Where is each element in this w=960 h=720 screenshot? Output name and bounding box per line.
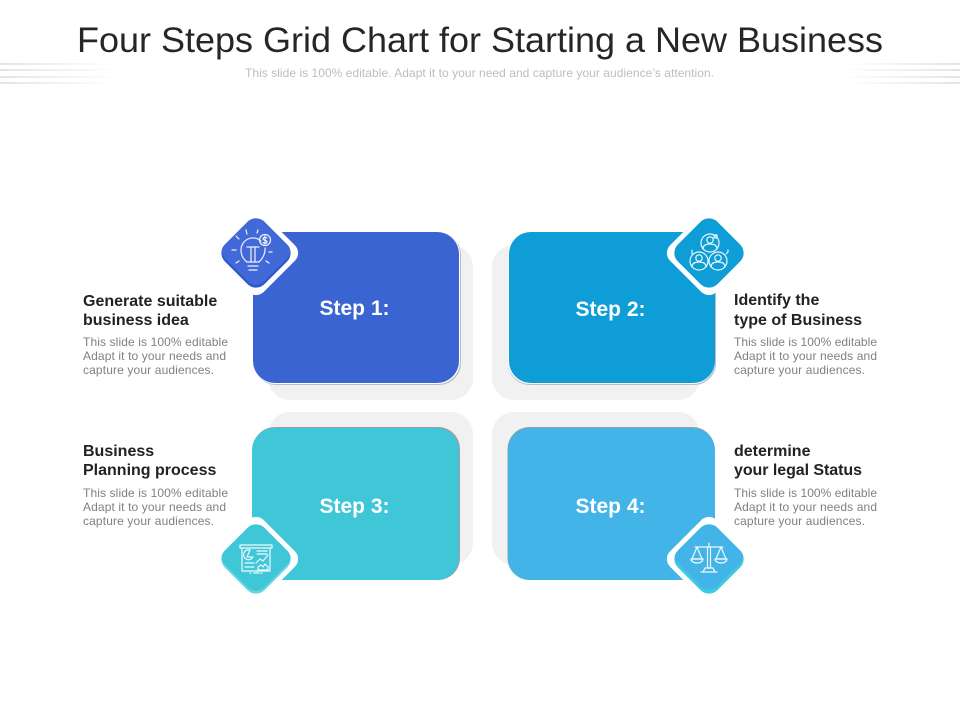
text block: step 2: type of Business bbox=[734, 312, 862, 329]
text block: step 2: Adapt it to your needs and bbox=[734, 349, 877, 363]
text block: step 4: determine bbox=[734, 443, 811, 460]
icon: light bulb with dollar bbox=[221, 218, 298, 296]
text block: step 2: This slide is 100% editable bbox=[734, 335, 877, 349]
step 3 label: Step 3: bbox=[319, 495, 390, 518]
panel: step 1 bbox=[253, 232, 473, 400]
text block: step 1: capture your audiences. bbox=[83, 363, 214, 377]
text block: step 2: Identify the bbox=[734, 292, 819, 309]
panel: step 2 bbox=[492, 232, 716, 400]
icon: presentation board bbox=[221, 516, 298, 594]
text block: step 4: your legal Status bbox=[734, 462, 862, 479]
text block: step 3: Planning process bbox=[83, 462, 216, 479]
step 2 label: Step 2: bbox=[575, 298, 646, 321]
text block: step 1: business idea bbox=[83, 312, 189, 329]
text block: step 3: Business bbox=[83, 443, 154, 460]
text block: step 1: This slide is 100% editable bbox=[83, 335, 228, 349]
text block: step 3: This slide is 100% editable bbox=[83, 486, 228, 500]
text block: step 1 bbox=[83, 293, 228, 377]
text block: step 2: capture your audiences. bbox=[734, 363, 865, 377]
step 4 label: Step 4: bbox=[575, 495, 646, 518]
text block: step 3: Adapt it to your needs and bbox=[83, 500, 226, 514]
icon: three people bbox=[662, 206, 756, 300]
text block: step 4 bbox=[734, 443, 877, 528]
subtitle: This slide is 100% editable. Adapt it to your need and capture your audience’s attention. bbox=[245, 66, 714, 80]
icon: balance scales bbox=[666, 516, 744, 594]
text block: step 1: Generate suitable bbox=[83, 293, 217, 310]
text block: step 2 bbox=[734, 292, 877, 377]
text block: step 4: Adapt it to your needs and bbox=[734, 500, 877, 514]
text block: step 4: capture your audiences. bbox=[734, 514, 865, 528]
text block: step 3 bbox=[83, 443, 228, 528]
title: Four Steps Grid Chart for Starting a New Business bbox=[77, 21, 883, 60]
text block: step 1: Adapt it to your needs and bbox=[83, 349, 226, 363]
text block: step 3: capture your audiences. bbox=[83, 514, 214, 528]
step 1 label: Step 1: bbox=[319, 297, 390, 320]
panel: step 4 bbox=[492, 412, 715, 580]
text block: step 4: This slide is 100% editable bbox=[734, 486, 877, 500]
panel: step 3 bbox=[252, 412, 473, 580]
